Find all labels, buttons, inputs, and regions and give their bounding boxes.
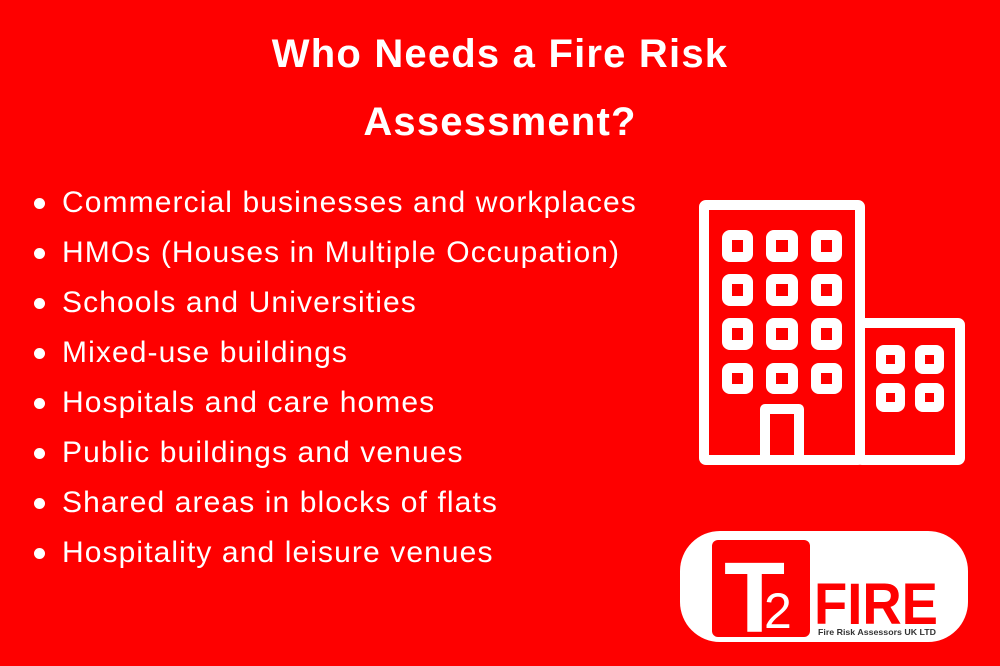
list: who needs assessment bbox=[34, 186, 637, 569]
list: who needs assessment: Mixed-use buildings bbox=[62, 336, 348, 369]
list: who needs assessment: Public buildings and venues bbox=[62, 436, 464, 469]
title: Assessment? bbox=[363, 100, 637, 144]
logo: T2 Fire: 2 bbox=[764, 583, 792, 639]
logo: T2 Fire bbox=[680, 531, 968, 642]
list: who needs assessment: Schools and Universities bbox=[62, 286, 417, 319]
list: who needs assessment: Hospitality and leisure venues bbox=[62, 536, 494, 569]
list: who needs assessment: Shared areas in blocks of flats bbox=[62, 486, 498, 519]
list: who needs assessment: Commercial businesses and workplaces bbox=[62, 186, 637, 219]
title: Who Needs a Fire Risk bbox=[272, 32, 728, 76]
logo: T2 Fire: FIRE bbox=[814, 572, 938, 637]
logo: T2 Fire: Fire Risk Assessors UK LTD bbox=[818, 627, 936, 637]
title bbox=[272, 32, 728, 144]
list: who needs assessment: HMOs (Houses in Multiple Occupation) bbox=[62, 236, 620, 269]
list: who needs assessment: Hospitals and care homes bbox=[62, 386, 435, 419]
